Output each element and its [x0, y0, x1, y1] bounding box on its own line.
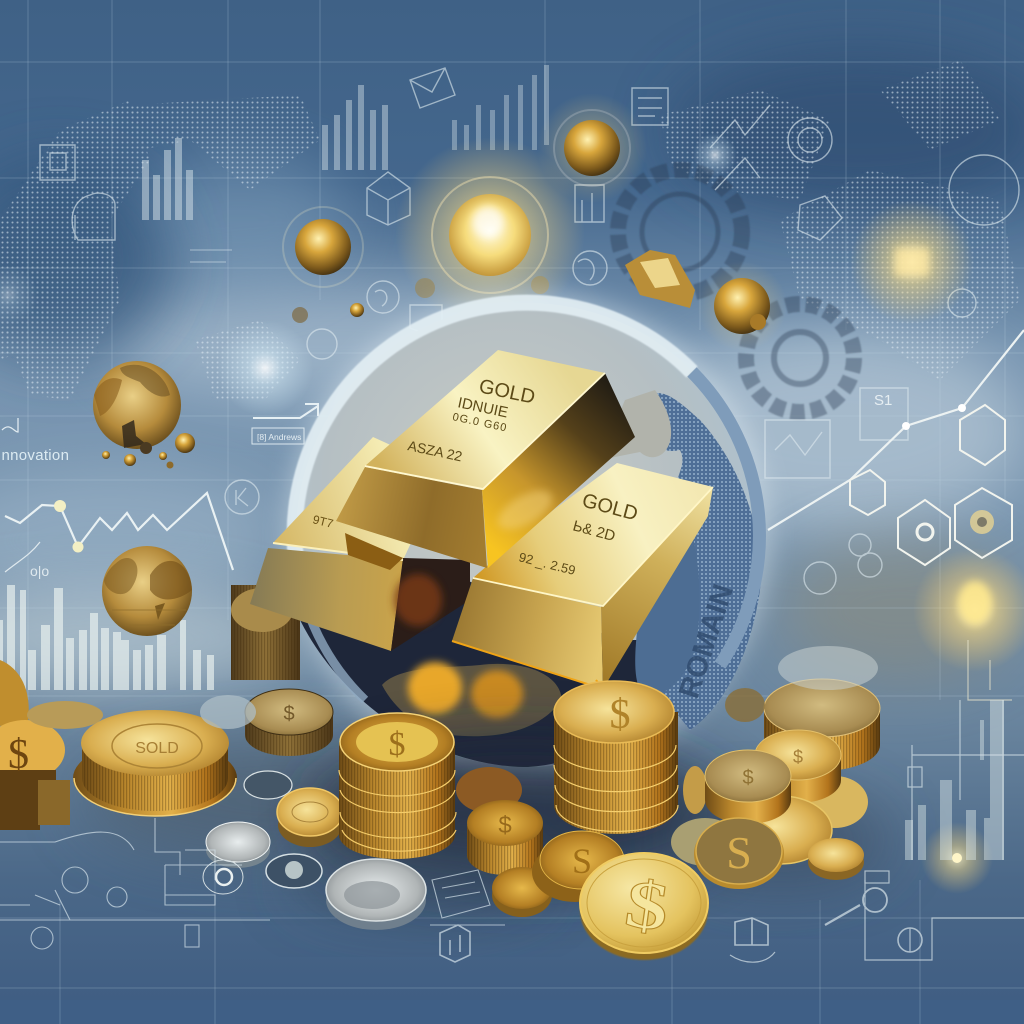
rust coin [456, 767, 522, 813]
line chart left [5, 493, 233, 579]
engraved text: 0G.0 G60 [451, 411, 508, 435]
low coin [492, 867, 552, 917]
lower right blueprint [730, 700, 1024, 962]
small coin [808, 838, 864, 880]
silver blur stack [778, 646, 878, 690]
stack [467, 800, 543, 875]
engraved text: ASZA 22 [406, 437, 464, 464]
orange coin: S [572, 841, 592, 881]
engraved text: GOLD [580, 490, 640, 526]
candlestick bars lower right [905, 700, 1004, 860]
dollar coin foreground: $ [621, 865, 674, 946]
orange coin [532, 831, 624, 902]
coins center low [456, 767, 552, 917]
top bar charts [142, 65, 549, 220]
hexagon network and line chart right [768, 330, 1024, 700]
gold nugget [625, 250, 695, 308]
hexagon network and line chart right: S1 [874, 392, 892, 409]
left bar chart [0, 585, 214, 690]
coin stack small: $ [283, 703, 295, 725]
light flares [0, 133, 1024, 894]
coin pale [671, 818, 739, 866]
dollar coin foreground [580, 853, 708, 960]
sphere 3 [537, 93, 647, 203]
engraved text: 92 _. 2.59 [517, 549, 577, 578]
silver coin [206, 822, 270, 868]
large coin left [73, 710, 237, 816]
sphere 1 [283, 207, 363, 287]
stack 2: $ [793, 747, 803, 767]
gold spheres top [283, 93, 787, 351]
large silver coin [326, 859, 426, 930]
grey sea patch [600, 390, 671, 460]
coin S [694, 818, 784, 889]
lower blueprint diagrams left [0, 818, 505, 962]
gold coin [277, 788, 343, 847]
engraved text: Ь& 2D [571, 517, 617, 545]
engraved text [406, 375, 537, 464]
gold bar lower right [452, 463, 713, 689]
behind stack [725, 688, 765, 722]
central globe [284, 291, 772, 779]
stack 2 [755, 730, 868, 828]
gold bar top [336, 350, 635, 568]
dotted world maps [0, 60, 1020, 400]
outline coin [266, 854, 322, 888]
dark underside [300, 570, 720, 767]
ring token [203, 860, 243, 894]
lit continent [382, 664, 562, 736]
rising arrow and small label [252, 404, 318, 444]
globe rim [295, 303, 692, 560]
coin stack center [339, 713, 456, 859]
coin stack right [554, 681, 678, 834]
stack 4: $ [742, 767, 754, 789]
stack 4 [683, 750, 791, 824]
gold bar lower left [250, 437, 470, 651]
stamp: 9T7 [311, 512, 335, 531]
small beads [292, 276, 549, 323]
line icons scattered [40, 68, 1019, 594]
stack: $ [498, 812, 512, 839]
coin-script band: ROMAIN [673, 580, 740, 702]
gold earth globe upper [93, 361, 195, 468]
coin S: S [726, 827, 752, 878]
coins behind left [0, 660, 103, 830]
coins behind left: $ [8, 732, 29, 778]
gears [618, 170, 854, 412]
coin stack behind bar [231, 585, 300, 680]
coin cluster right [671, 646, 880, 889]
innovation label [0, 418, 69, 464]
coin 3 [728, 796, 832, 864]
gold earth globe lower [102, 546, 192, 636]
small coins left [203, 771, 426, 930]
sphere 4 [697, 261, 787, 351]
outline token [244, 771, 292, 799]
coin stack small [200, 689, 333, 756]
engraved text [517, 490, 640, 578]
coin stack center: $ [388, 726, 406, 763]
engraved text: IDNUIE [456, 394, 509, 421]
floor shadow under coins [290, 745, 890, 915]
engraved text: GOLD [477, 375, 537, 409]
coin stack right: $ [610, 692, 630, 738]
central glowing sphere [395, 137, 585, 327]
large coin left: SOLD [135, 740, 179, 757]
rising arrow and small label: [8] Andrews [257, 432, 301, 442]
top wide stack [764, 679, 880, 771]
continent blue upper right [640, 393, 761, 730]
line chart left: o|o [30, 563, 49, 579]
